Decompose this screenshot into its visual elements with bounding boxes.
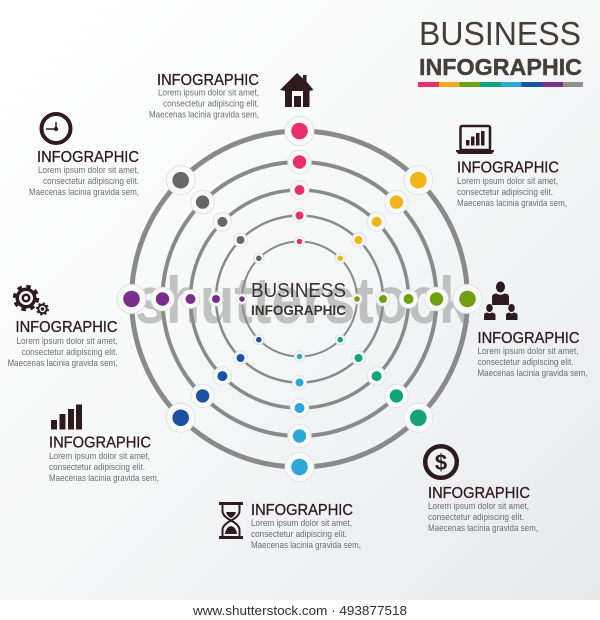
center title: BUSINESS xyxy=(251,280,346,302)
nodes: north-west grey xyxy=(166,166,264,263)
title: business infographic: BUSINESS xyxy=(419,16,581,53)
text block: lower left xyxy=(49,434,159,483)
text block: right: Maecenas lacinia gravida sem, xyxy=(478,368,588,378)
text block: lower right: consectetur adipiscing elit. xyxy=(428,512,524,522)
text block: left: consectetur adipiscing elit. xyxy=(22,347,118,357)
text block: top: Maecenas lacinia gravida sem, xyxy=(149,110,259,120)
text block: right: consectetur adipiscing elit. xyxy=(478,357,574,367)
text block: bottom: consectetur adipiscing elit. xyxy=(251,529,347,539)
icon: clock xyxy=(42,114,70,143)
center title: INFOGRAPHIC xyxy=(251,303,346,318)
icon: hourglass xyxy=(219,502,243,539)
nodes: south-west dark blue xyxy=(166,335,264,432)
icon: house xyxy=(280,73,314,107)
text block: top: consectetur adipiscing elit. xyxy=(163,98,259,108)
text block: left xyxy=(8,319,118,368)
icon: dollar coin xyxy=(425,446,457,478)
text block: lower right: Maecenas lacinia gravida sem, xyxy=(428,523,538,533)
text block: upper right xyxy=(457,160,567,208)
text block: upper left: Lorem ipsum dolor sit amet, xyxy=(38,165,139,175)
watermark: shutterstock xyxy=(135,263,470,337)
text block: right: INFOGRAPHIC xyxy=(478,330,580,347)
text block: top: Lorem ipsum dolor sit amet, xyxy=(158,88,259,98)
text block: lower right xyxy=(428,485,538,533)
nodes: top pink xyxy=(285,116,314,246)
text block: lower left: consectetur adipiscing elit. xyxy=(49,462,145,472)
title colour bar xyxy=(418,82,583,87)
title: business infographic: INFOGRAPHIC xyxy=(419,54,582,80)
text block: bottom: Lorem ipsum dolor sit amet, xyxy=(251,518,352,528)
text block: upper right: Lorem ipsum dolor sit amet, xyxy=(457,176,558,186)
text block: upper right: INFOGRAPHIC xyxy=(457,160,559,176)
text block: upper right: Maecenas lacinia gravida sem, xyxy=(457,198,567,208)
text block: lower right: INFOGRAPHIC xyxy=(428,485,530,502)
nodes: west purple xyxy=(117,284,247,314)
text block: lower left: Lorem ipsum dolor sit amet, xyxy=(49,451,150,461)
text block: right: Lorem ipsum dolor sit amet, xyxy=(478,346,578,356)
text block: lower left: Maecenas lacinia gravida sem, xyxy=(49,473,159,483)
concentric rings xyxy=(132,131,468,467)
text block: upper left xyxy=(29,149,139,197)
text block: upper left: consectetur adipiscing elit. xyxy=(43,176,139,186)
icon: people hierarchy xyxy=(484,282,518,320)
text block: upper left: INFOGRAPHIC xyxy=(37,149,139,166)
nodes: south-east teal xyxy=(335,335,433,432)
footer credit: www.shutterstock.com · 493877518 xyxy=(192,603,407,618)
title: business infographic xyxy=(419,16,582,80)
text block: lower right: Lorem ipsum dolor sit amet, xyxy=(428,501,529,511)
text block: top xyxy=(149,72,259,120)
text block: top: INFOGRAPHIC xyxy=(157,72,259,89)
nodes: north-east yellow xyxy=(335,166,433,263)
text block: left: Lorem ipsum dolor sit amet, xyxy=(16,336,118,346)
text block: left: INFOGRAPHIC xyxy=(16,319,118,336)
nodes: east green xyxy=(352,284,482,314)
text block: upper right: consectetur adipiscing elit. xyxy=(457,187,553,197)
text block: bottom: INFOGRAPHIC xyxy=(251,502,353,519)
nodes: south light blue xyxy=(285,352,314,482)
text block: left: Maecenas lacinia gravida sem, xyxy=(8,358,118,368)
icon: dollar coin: $ xyxy=(435,450,447,475)
center title xyxy=(251,280,346,318)
text block: right xyxy=(478,330,588,378)
text block: upper left: Maecenas lacinia gravida sem, xyxy=(29,187,139,197)
text block: lower left: INFOGRAPHIC xyxy=(49,434,151,452)
text block: bottom: Maecenas lacinia gravida sem, xyxy=(251,540,361,550)
icon: bar chart xyxy=(51,404,82,430)
icon: gears xyxy=(14,286,48,314)
icon: laptop with chart xyxy=(456,126,494,154)
text block: bottom xyxy=(251,502,361,550)
